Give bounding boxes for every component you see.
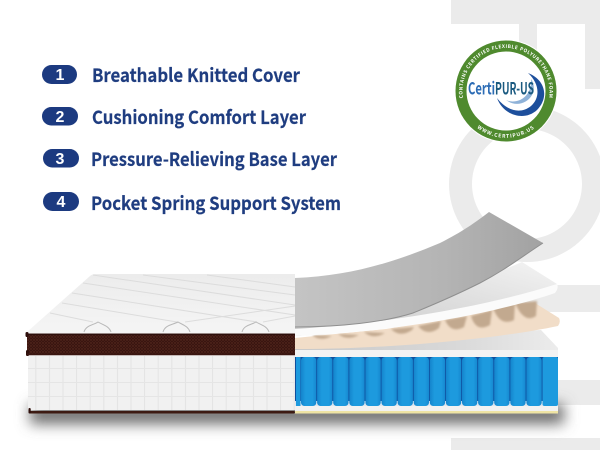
legend item 4: 4: [57, 194, 66, 211]
layer legend: [42, 62, 341, 216]
brown bottom piping: [28, 408, 295, 414]
grey knitted cover layer: [295, 212, 543, 327]
white comfort layer: [295, 262, 558, 336]
pocket springs: [295, 357, 558, 406]
legend item 4: Pocket Spring Support System: [91, 190, 341, 216]
watermark lettering: [449, 0, 600, 450]
brown mesh border: [26, 332, 295, 356]
CertiPUR-US badge: [456, 40, 556, 142]
CertiPUR-US badge: PUR-US: [495, 74, 534, 100]
legend item 1: Breathable Knitted Cover: [92, 62, 301, 88]
quilted white side panel: [28, 356, 295, 410]
CertiPUR-US badge: Certi: [468, 74, 495, 100]
CertiPUR-US badge: CONTAINS CERTIFIED FLEXIBLE POLYURETHANE FOAM: [458, 44, 554, 98]
ground shadow: [30, 404, 564, 424]
legend item 1: 1: [56, 67, 65, 84]
legend item 2: 2: [56, 109, 65, 126]
swoosh: [497, 73, 544, 116]
quilted top surface: [27, 274, 295, 333]
side foam band: [295, 350, 558, 357]
CertiPUR-US badge: WWW.CERTIPUR.US: [478, 124, 534, 138]
lower foam top surface: [295, 330, 558, 350]
legend item 3: Pressure-Relieving Base Layer: [91, 146, 338, 172]
legend item 2: Cushioning Comfort Layer: [92, 104, 307, 130]
base foam and yellow strip: [295, 406, 558, 414]
mattress: [26, 212, 564, 424]
convoluted foam layer: [295, 301, 560, 349]
legend item 3: 3: [56, 151, 65, 168]
